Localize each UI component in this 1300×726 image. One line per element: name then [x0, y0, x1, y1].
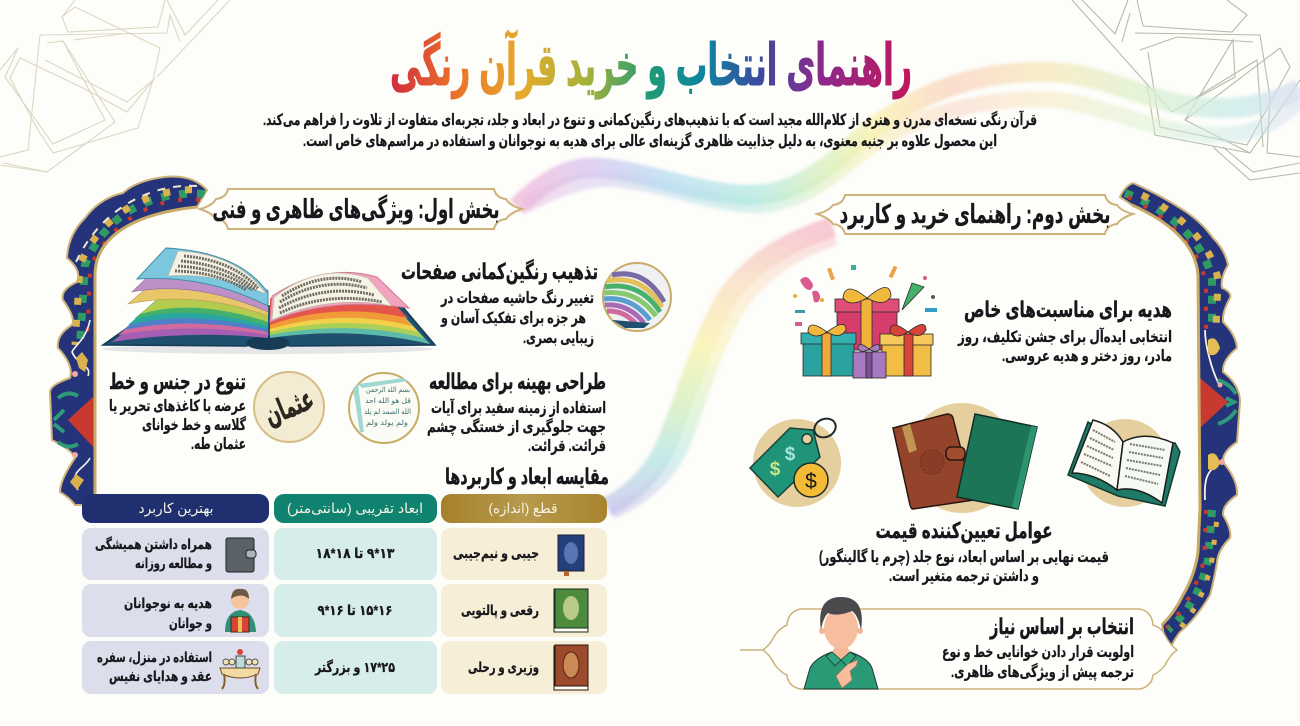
row: medium [82, 584, 607, 637]
row: pocket: جیبی و نیم‌جیبی [453, 545, 539, 562]
icon: page text circle [349, 373, 419, 443]
feature: paper and script variety: گلاسه و خط خوانای [142, 415, 247, 434]
icon: page text circle: الله الصمد لم يلد [364, 407, 411, 416]
decorative geometric pattern: top left [0, 0, 230, 172]
feature: price factors: و داشتن ترجمه متغیر است. [889, 568, 1039, 585]
column header: size: قطع (اندازه) [488, 500, 558, 517]
comparison table [82, 494, 607, 694]
feature: price factors: قیمت نهایی بر اساس ابعاد، نوع جلد (چرم یا گالینگور) [819, 547, 1109, 567]
feature: paper and script variety: عثمان طه. [191, 436, 246, 453]
icon: open book on circle [1068, 419, 1180, 507]
intro paragraph: این محصول علاوه بر جنبه معنوی، به دلیل جذابیت ظاهری گزینه‌ای عالی برای هدیه به نوجوانان و استفاده در مراسم‌های خاص است. [303, 131, 997, 150]
icon: calligraphy circle [254, 372, 324, 442]
column header: dimensions [274, 494, 437, 523]
feature: optimized reading design: قرائت. قرائت. [528, 438, 606, 455]
icon: brown book [554, 645, 588, 690]
icon: person gesturing [804, 597, 878, 689]
icon: page text circle: ولم يولد ولم [366, 418, 408, 427]
icon: teen with gift [225, 589, 256, 632]
row: pocket: و مطالعه روزانه [135, 555, 212, 572]
callout: choosing by need [740, 597, 1177, 689]
feature: rainbow page gilding: تذهیب رنگین‌کمانی صفحات [401, 258, 598, 285]
column header: size [441, 494, 607, 523]
feature: optimized reading design: جهت جلوگیری از خستگی چشم [427, 417, 606, 437]
feature: paper and script variety: عرضه با کاغذهای تحریر یا [109, 398, 246, 415]
feature: price factors [819, 518, 1109, 585]
callout: choosing by need: انتخاب بر اساس نیاز [989, 614, 1134, 640]
row: medium: هدیه به نوجوانان [124, 595, 212, 612]
illustration: gift boxes [793, 265, 937, 378]
icon: green book [554, 589, 588, 632]
icon: price tag and coin [750, 415, 841, 507]
feature: paper and script variety: تنوع در جنس و خط [109, 369, 246, 395]
callout: choosing by need: ترجمه پیش از ویژگی‌های ظاهری. [951, 662, 1134, 682]
heading badge: section one: بخش اول: ویژگی‌های ظاهری و فنی [212, 194, 500, 225]
feature: rainbow page gilding: تغییر رنگ حاشیه صفحات در [440, 289, 594, 307]
row: medium: ۱۶*۱۵ تا ۱۶*۹ [318, 602, 392, 618]
feature: paper and script variety [109, 369, 247, 453]
feature: gift for special occasions: انتخابی ایده‌آل برای جشن تکلیف، روز [957, 327, 1172, 346]
icon: price tag and coin: $ [785, 444, 796, 465]
icon: aqd table [220, 649, 260, 689]
row: medium: و جوانان [169, 615, 212, 632]
heading badge: section two: بخش دوم: راهنمای خرید و کاربرد [840, 199, 1110, 230]
row: large: ۲۵*۱۷ و بزرگتر [314, 659, 395, 676]
row: large: عقد و هدایای نفیس [109, 668, 212, 685]
decorative geometric pattern: top right [1072, 0, 1300, 180]
feature: rainbow page gilding: زیبایی بصری. [523, 330, 594, 347]
row: pocket [82, 528, 607, 580]
icon: page text circle: قل هو الله احد [365, 396, 411, 405]
icon: rainbow page edges circle [603, 263, 671, 331]
feature: gift for special occasions: هدیه برای مناسبت‌های خاص [964, 297, 1172, 323]
feature: gift for special occasions [957, 297, 1172, 365]
icon: price tag and coin: $ [805, 470, 817, 493]
intro paragraph [263, 110, 1037, 150]
row: pocket: همراه داشتن همیشگی [95, 536, 212, 553]
illustration: open rainbow book [103, 248, 435, 354]
feature: optimized reading design: طراحی بهینه برای مطالعه [429, 369, 606, 395]
icon: leather and cloth bindings [893, 403, 1037, 513]
feature: optimized reading design [427, 369, 606, 455]
panel: section two [740, 195, 1180, 689]
feature: optimized reading design: استفاده از زمینه سفید برای آیات [431, 398, 606, 417]
row: medium: رقعی و پالتویی [461, 602, 539, 619]
heading badge: section one [200, 189, 522, 229]
column header: best use: بهترین کاربرد [138, 500, 214, 517]
row: pocket: ۱۳*۹ تا ۱۸*۱۸ [316, 545, 395, 561]
row: large: وزیری و رحلی [468, 659, 539, 676]
callout: choosing by need: اولویت قرار دادن خوانایی خط و نوع [942, 644, 1134, 661]
column header: best use [82, 494, 269, 523]
column header: dimensions: ابعاد تفریبی (سانتی‌متر) [287, 500, 423, 517]
icon: price tag and coin: $ [770, 459, 781, 480]
icon: page text circle: بسم الله الرحمن [366, 385, 410, 394]
row: large: استفاده در منزل، سفره [97, 649, 212, 666]
icon: calligraphy circle: عثمان [260, 383, 319, 432]
rainbow ribbon: across top [517, 72, 1300, 207]
feature: rainbow page gilding [401, 258, 598, 347]
left ornamental frame [50, 176, 207, 505]
feature: rainbow page gilding: هر جزه برای تفکیک آسان و [440, 308, 586, 327]
feature: gift for special occasions: مادر، روز دختر و هدیه عروسی. [1002, 348, 1172, 365]
icon: navy book [558, 535, 584, 576]
table heading: مقایسه ابعاد و کاربردها [445, 464, 609, 490]
panel: section one [82, 189, 671, 694]
rainbow ribbon: connecting panels [607, 227, 835, 512]
feature: price factors: عوامل تعیین‌کننده قیمت [876, 518, 1052, 544]
right ornamental frame [1120, 183, 1240, 655]
row: large [82, 641, 607, 694]
heading badge: section two [817, 195, 1133, 234]
icon: wallet book [226, 538, 256, 572]
